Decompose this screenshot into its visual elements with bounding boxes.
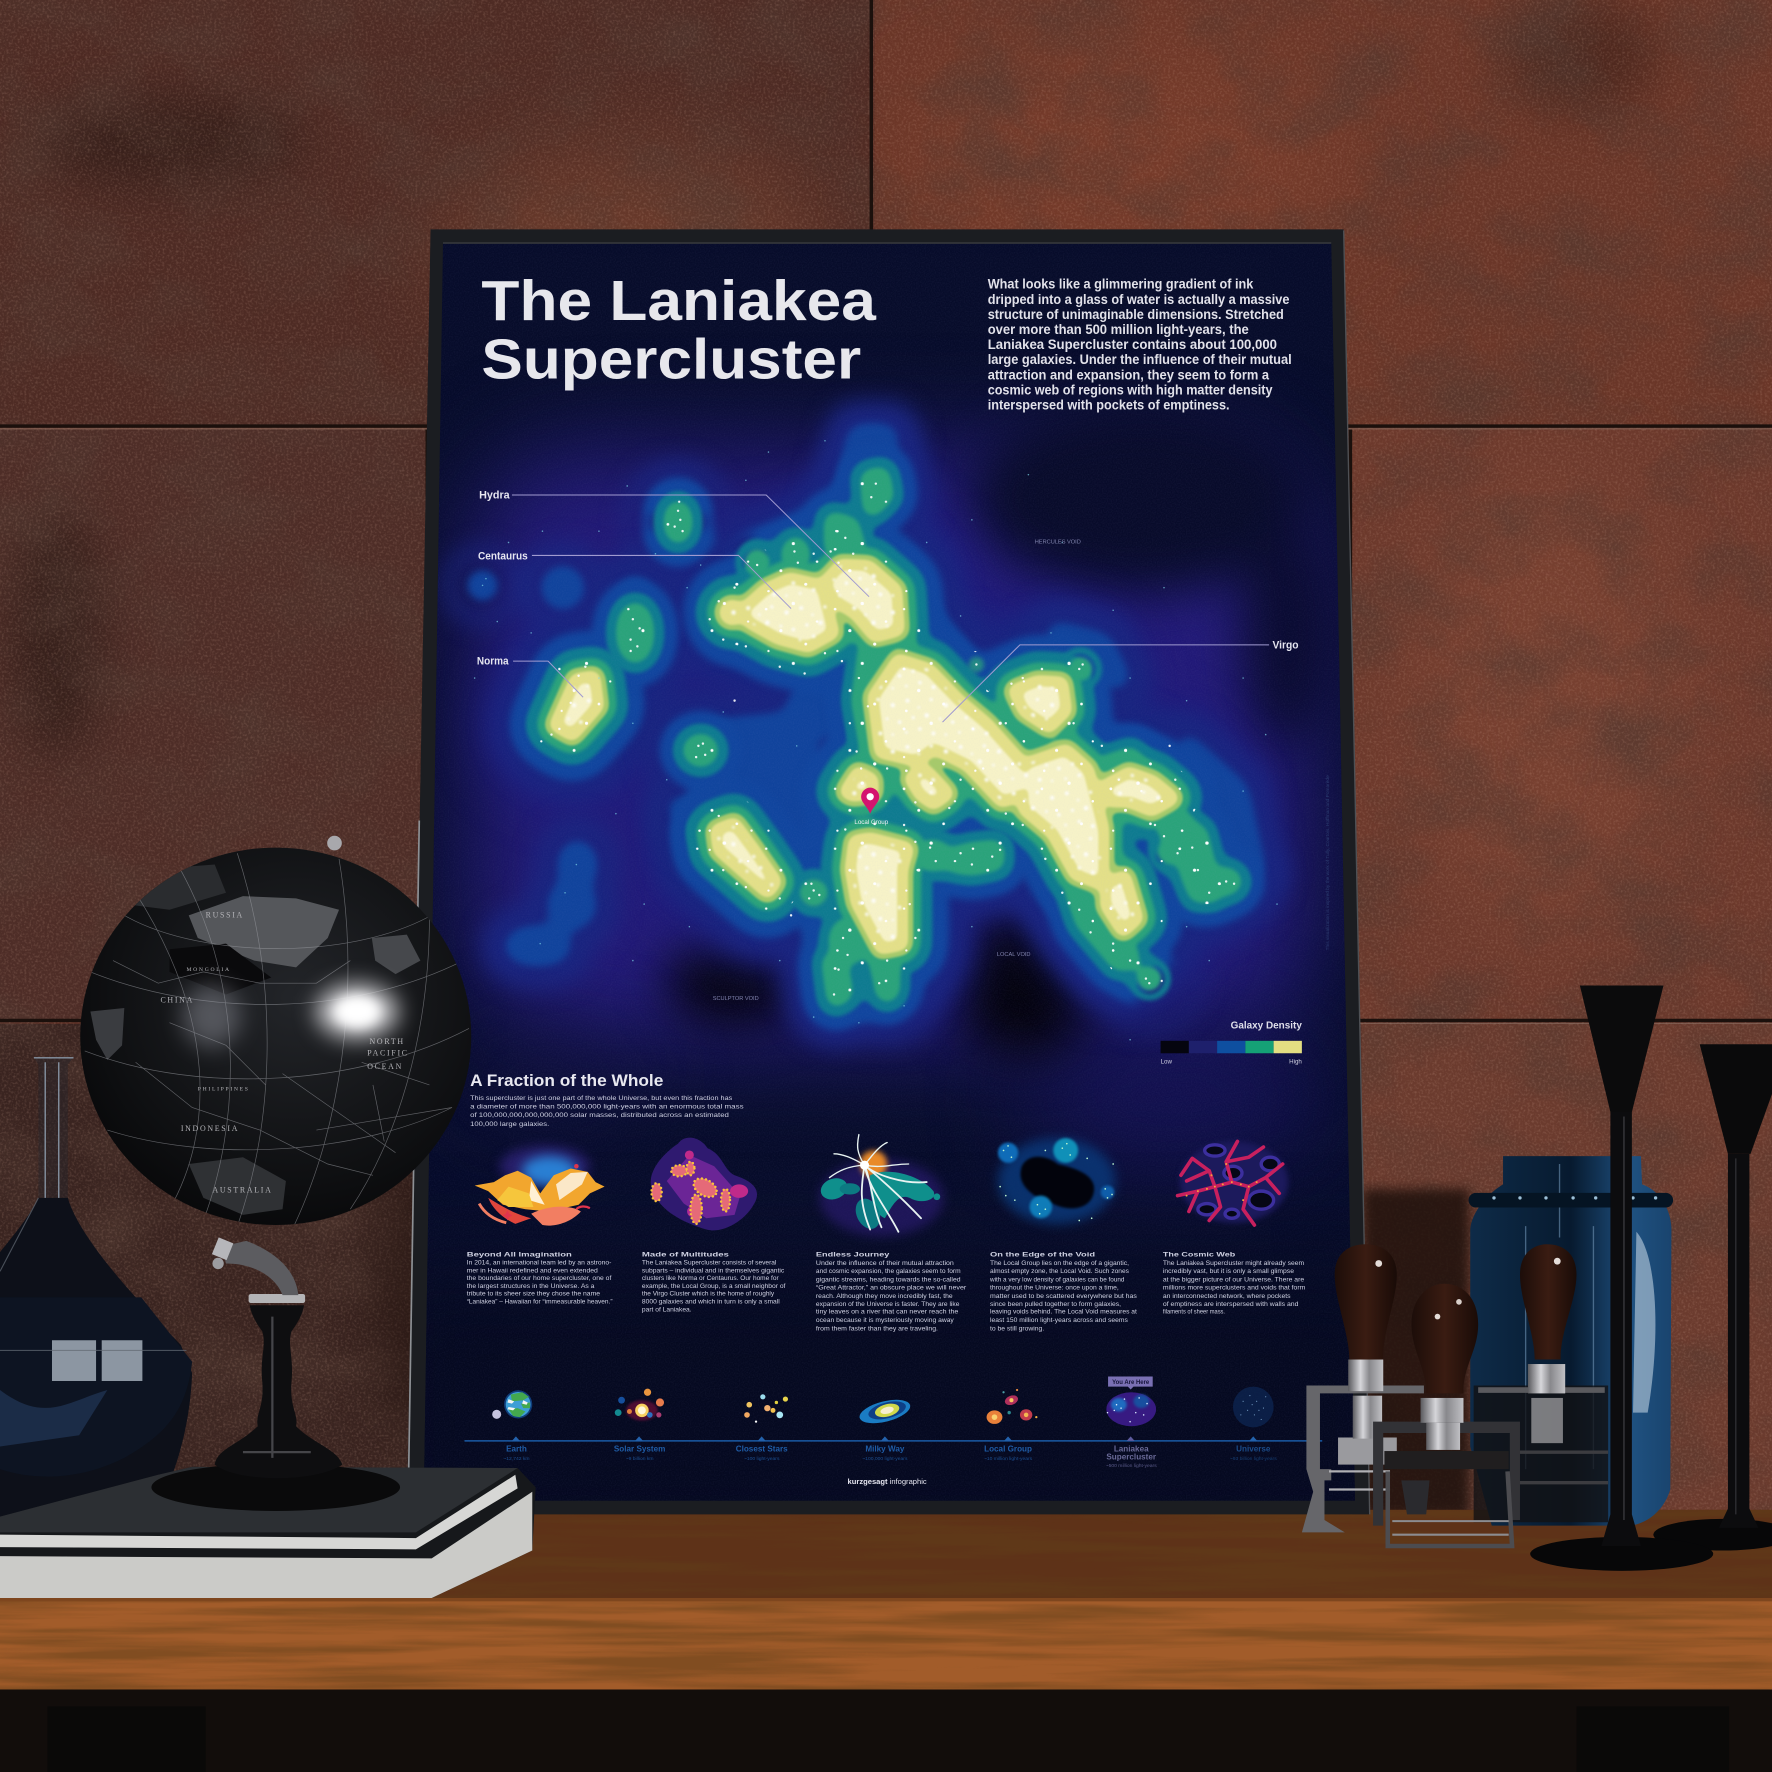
text column: beyond all imagination: “Laniakea” – Hawaiian for “immeasurable heaven.” [467,1299,613,1306]
title: Supercluster [481,328,861,391]
local group pin: Local Group [854,819,889,826]
section intro: a diameter of more than 500,000,000 light-years with an enormous total mass [470,1104,744,1111]
scale labels: Laniakea [1114,1445,1149,1454]
text column: the cosmic web: filaments of sheer mass. [1163,1309,1225,1316]
wooden shelf [0,1510,1772,1772]
section intro: This supercluster is just one part of the whole Universe, but even this fraction has [470,1095,732,1102]
galaxy density legend: Low [1161,1058,1173,1065]
map callouts: Virgo [1272,640,1299,652]
text column: made of multitudes: The Laniakea Supercluster consists of several [642,1260,776,1267]
text column: on the edge of the void: On the Edge of the Void [990,1252,1095,1259]
intro paragraph: interspersed with pockets of emptiness. [988,397,1230,412]
text column: on the edge of the void: matter used to be scattered everywhere but has [990,1293,1137,1300]
text column: endless journey: expansion of the Universe is faster. They are like [816,1301,960,1308]
scale labels: Solar System [614,1445,665,1454]
globe map: OCEAN [367,1062,403,1071]
globe map [85,853,469,1226]
section intro: 100,000 large galaxies. [470,1121,550,1128]
intro paragraph: Laniakea Supercluster contains about 100,000 [988,337,1277,352]
void labels: LOCAL VOID [997,952,1031,958]
vase [1470,1156,1671,1526]
text column: endless journey: from them faster than they are traveling. [816,1326,938,1333]
globe stand [151,1237,400,1511]
scale labels: ~100,000 light-years [862,1456,908,1462]
scale labels: Universe [1236,1445,1271,1454]
fine print: This visualization is inspired by the work of Tully, Courtois, Hoffman and Pomarède [1325,775,1330,950]
scale labels: ~12,742 km [503,1456,530,1462]
text column: on the edge of the void: leaving voids behind. The Local Void measures at [990,1309,1137,1316]
title [481,269,876,391]
text column: on the edge of the void: since been pulled together to form galaxies, [990,1301,1121,1308]
stamp left [1302,1244,1424,1532]
dither [407,237,1379,1509]
scale labels: Local Group [984,1445,1032,1454]
scale icon: local group [987,1389,1037,1424]
scale labels: Supercluster [1106,1453,1157,1462]
text column: on the edge of the void: least 150 million light-years across and seems [990,1317,1128,1324]
text column: the cosmic web: The Cosmic Web [1163,1252,1235,1259]
text column: made of multitudes: Made of Multitudes [642,1252,730,1259]
section intro [470,1095,744,1128]
section intro: of 100,000,000,000,000,000 solar masses, distributed across an estimated [470,1112,730,1119]
text column: endless journey [816,1252,966,1333]
you are here tag [1108,1376,1153,1389]
candlestick left [1530,985,1713,1571]
globe map: MONGOLIA [186,967,231,973]
text column: endless journey: tiny leaves on a river that can never reach the [816,1309,959,1316]
illustration: multitudes clusters [651,1138,757,1230]
text column: on the edge of the void: with a very low density of galaxies can be found [989,1277,1125,1284]
text column: endless journey: and cosmic expansion, the galaxies seem to form [816,1268,961,1275]
globe map: AUSTRALIA [212,1185,273,1194]
globe map: PHILIPPINES [198,1087,250,1093]
text column: made of multitudes: example, the Local Group, is a small neighbor of [642,1283,786,1290]
scale labels: ~500 million light-years [1106,1463,1157,1469]
scale icon: laniakea [1106,1392,1156,1426]
text column: beyond all imagination: tribute to its sheer size they chose the name [467,1291,601,1298]
scale icon: closest stars [744,1394,788,1423]
text column: the cosmic web [1163,1252,1305,1316]
galaxy density legend [1161,1020,1302,1065]
text column: made of multitudes: clusters like Norma or Centaurus. Our home for [642,1275,779,1282]
galaxy density legend: High [1289,1058,1302,1065]
scale labels: Milky Way [865,1445,905,1454]
globe sphere [80,848,471,1225]
void shadows [667,401,1334,1059]
illustration: great attractor streams [818,1135,944,1236]
text column: the cosmic web: of emptiness are interspersed with walls and [1163,1301,1299,1308]
scale labels: ~93 billion light-years [1230,1456,1277,1462]
illustration: exploding structure [475,1146,605,1226]
scale icon: earth [492,1390,532,1419]
intro paragraph: large galaxies. Under the influence of their mutual [988,352,1292,367]
text column: endless journey: reach. Although they move incredibly fast, the [816,1293,953,1300]
text column: beyond all imagination: mer in Hawaii redefined and even extended [467,1267,598,1274]
globe glare [182,984,241,1048]
globe map: INDONESIA [181,1124,239,1133]
density map [475,401,1334,1059]
text column: beyond all imagination: Beyond All Imagination [467,1252,572,1259]
text column: made of multitudes: 8000 galaxies and which in turn is only a small [642,1299,780,1306]
candlestick right [1653,1044,1772,1550]
local group pin [854,788,889,826]
scale labels: Closest Stars [736,1445,788,1454]
text column: the cosmic web: an interconnected network, where pockets [1163,1293,1291,1300]
text column: made of multitudes: subparts – individual and in themselves gigantic [642,1267,784,1274]
intro paragraph: What looks like a glimmering gradient of ink [988,277,1254,292]
text column: the cosmic web: incredibly vast, but it is only a small glimpse [1163,1268,1294,1275]
illustration: cosmic web [1178,1141,1288,1225]
scale labels: ~10 million light-years [984,1456,1033,1462]
frame highlights [408,231,1370,1514]
scale labels [503,1445,1277,1469]
void labels: SCULPTOR VOID [713,996,759,1002]
poster frame [407,229,1370,1514]
text column: the cosmic web: at the bigger picture of our Universe. There are [1163,1277,1305,1284]
title: The Laniakea [481,269,876,332]
map callouts: Norma [477,656,510,668]
scale icon: solar system [615,1389,664,1421]
scale timeline [464,1376,1322,1469]
text column: endless journey: ocean because it is mysteriously moving away [816,1317,955,1324]
text column: beyond all imagination [467,1252,613,1306]
globe on stand [80,836,471,1511]
text column: on the edge of the void: to be still growing. [990,1326,1044,1333]
scale labels: Earth [506,1445,527,1454]
you are here tag: You Are Here [1112,1380,1150,1386]
intro paragraph: dripped into a glass of water is actually a massive [988,292,1290,307]
illustration: local void [998,1138,1115,1224]
scale labels: ~100 light-years [744,1456,780,1462]
poster [424,244,1355,1501]
globe map: CHINA [160,995,194,1004]
intro paragraph: structure of unimaginable dimensions. Stretched [988,307,1284,322]
text column: the cosmic web: millions more superclusters and voids that form [1163,1284,1305,1291]
map callouts: Hydra [479,489,511,501]
text column: made of multitudes: the Virgo Cluster which is the home of roughly [642,1291,775,1298]
scale icon: universe [1233,1387,1274,1427]
intro paragraph: over more than 500 million light-years, the [988,322,1249,337]
globe map: NORTH [370,1037,405,1046]
intro paragraph [988,277,1292,412]
text column: beyond all imagination: In 2014, an international team led by an astrono- [467,1260,611,1267]
text column: endless journey: “Great Attractor,” an obscure place we will never [816,1284,966,1291]
scale labels: ~9 billion km [626,1456,654,1462]
text column: on the edge of the void: throughout the Universe: once upon a time, [990,1284,1119,1291]
stamp center [1373,1284,1520,1546]
text column: on the edge of the void: almost empty zone, the Local Void. Such zones [990,1268,1129,1275]
intro paragraph: cosmic web of regions with high matter density [988,382,1273,397]
text column: on the edge of the void: The Local Group lies on the edge of a gigantic, [990,1260,1129,1267]
credit: kurzgesagt infographic [848,1477,927,1486]
stamp rear right [1474,1244,1608,1522]
galaxies as star dots [551,484,1234,994]
text column: made of multitudes [642,1252,786,1313]
text column: the cosmic web: The Laniakea Supercluster might already seem [1163,1260,1304,1267]
globe map: RUSSIA [206,911,244,920]
text column: beyond all imagination: the largest structures in the Universe. As a [467,1283,595,1290]
books [0,1467,536,1598]
map callouts: Centaurus [478,550,528,562]
heading: a fraction of the whole: A Fraction of the Whole [470,1071,663,1090]
galaxy density legend: Galaxy Density [1231,1020,1302,1031]
map callouts [477,489,1299,722]
flask [0,1058,192,1517]
text column: endless journey: Under the influence of their mutual attraction [816,1260,954,1267]
text column: made of multitudes: part of Laniakea. [642,1306,692,1313]
text column: beyond all imagination: the boundaries of our home supercluster, one of [467,1275,612,1282]
void labels: HERCULES VOID [1035,540,1081,546]
globe map: PACIFIC [367,1049,409,1058]
void labels [713,540,1081,1002]
intro paragraph: attraction and expansion, they seem to form a [988,367,1270,382]
text column: on the edge of the void [989,1252,1137,1333]
scale icon: milky way [857,1395,913,1428]
text column: endless journey: gigantic streams, heading towards the so-called [816,1277,961,1284]
text column: endless journey: Endless Journey [816,1252,890,1259]
poster background [424,244,1355,1501]
